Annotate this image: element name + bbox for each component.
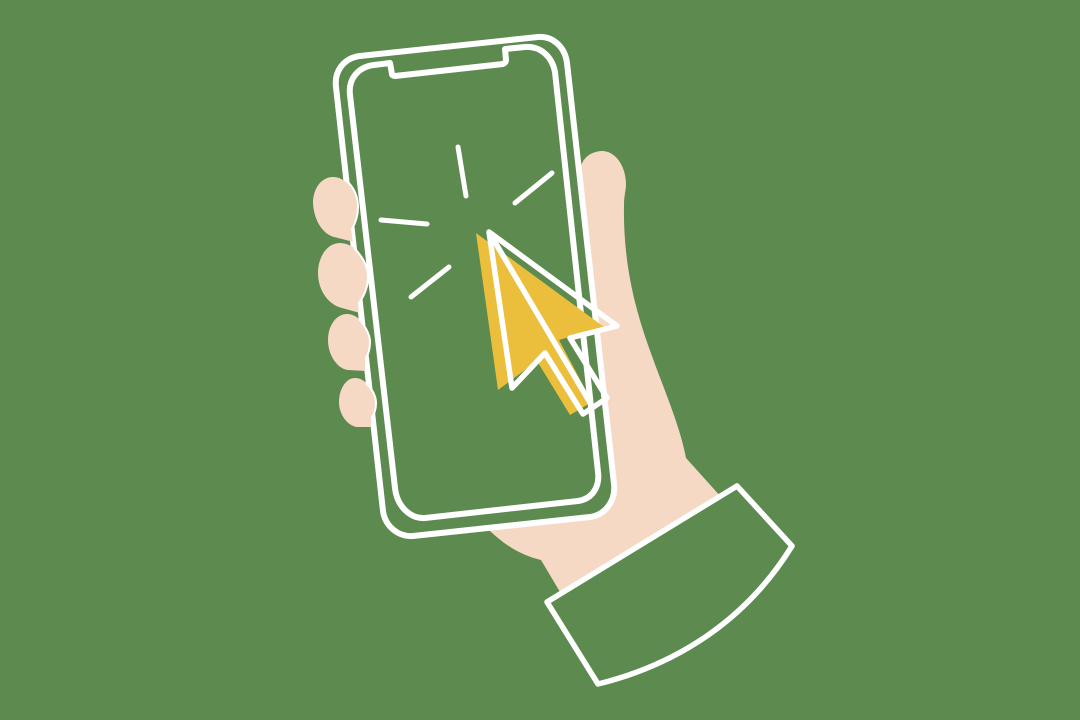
finger 2 edge [354,248,368,314]
finger 1 edge [347,181,358,243]
finger 3 [328,314,370,371]
shirt cuff [547,486,792,684]
finger 2 [318,243,368,313]
hand and thumb [490,151,722,592]
cursor white outline [489,232,617,414]
phone body [336,37,614,536]
cursor yellow shadow [476,233,604,415]
phone inner outline with notch [350,47,598,518]
click rays [381,147,552,297]
finger 4 [339,378,376,427]
finger 1 [313,177,358,242]
phone outer outline [336,37,614,536]
finger 3 edge [359,319,370,371]
fingers [313,177,376,428]
finger 4 edge [366,383,376,428]
